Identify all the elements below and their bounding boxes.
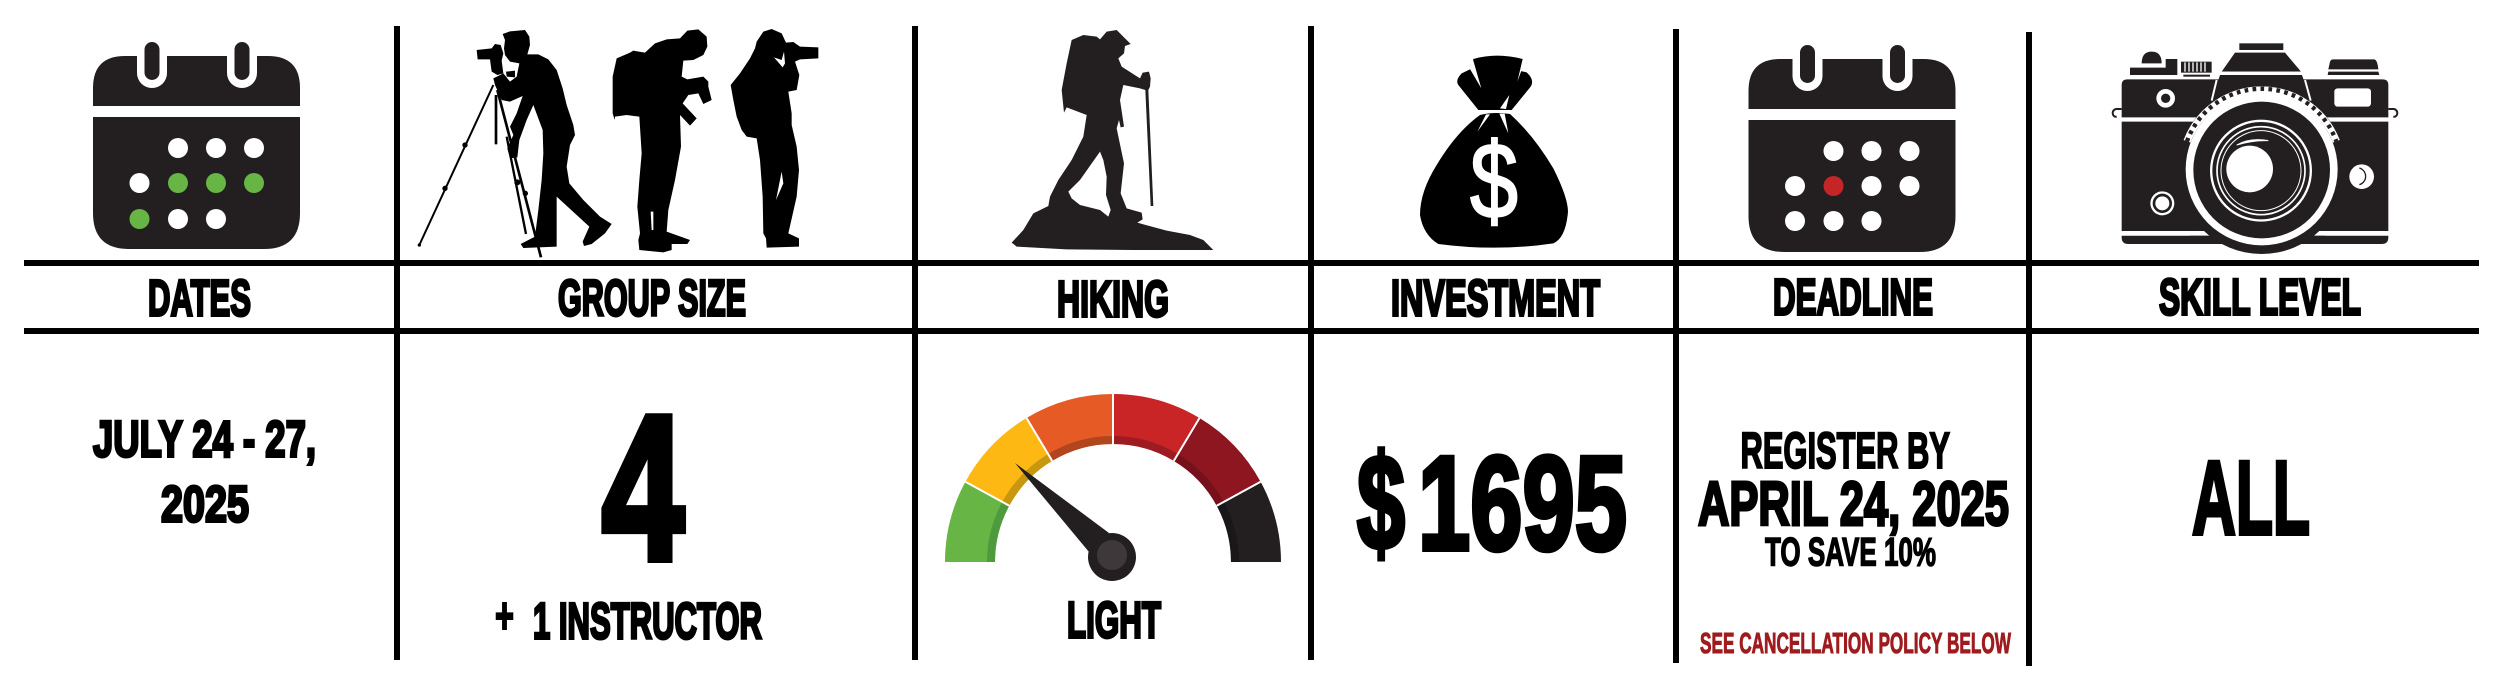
panel: skill level (2113, 43, 2397, 557)
heading: hiking: HIKING (1057, 270, 1169, 328)
text: group size number: 4 (602, 373, 684, 603)
icon: three photographers (418, 29, 818, 257)
text: plus one instructor: 1 INSTRUCTOR (533, 592, 762, 650)
panel: investment (1357, 56, 1627, 578)
text: price (1357, 427, 1627, 578)
panel: hiking (945, 30, 1281, 649)
panel: dates (93, 30, 316, 532)
panel: group size (418, 29, 818, 649)
camera lens (2186, 93, 2338, 245)
text: hiking level: LIGHT (1067, 592, 1161, 648)
icon: hiker on rock (1012, 30, 1213, 250)
text: discount: TO SAVE 10% (1765, 530, 1936, 574)
text: plus one instructor: + (495, 587, 514, 644)
text: date range (93, 410, 316, 532)
text: date range: 2025 (161, 476, 249, 532)
icon: camera (2113, 43, 2397, 254)
text: skill level value: ALL (2192, 440, 2310, 557)
icon: money bag: $ (1470, 120, 1518, 241)
gauge needle (1015, 463, 1136, 581)
camera knobs (2150, 164, 2374, 215)
text: deadline date: APRIL 24, 2025 (1698, 469, 2009, 539)
photographer looking at camera (613, 29, 712, 252)
text: date range: JULY 24 - 27, (93, 410, 316, 468)
icon: calendar with green dates (93, 30, 300, 249)
text: price: $ (1357, 427, 1405, 578)
text: register by: REGISTER BY (1740, 422, 1950, 479)
text: plus one instructor (495, 587, 762, 650)
photographer with telephoto lens (731, 29, 818, 248)
icon: money bag (1420, 56, 1568, 248)
heading: investment: INVESTMENT (1391, 270, 1600, 326)
heading: skill level: SKILL LEVEL (2159, 268, 2361, 326)
heading: dates: DATES (148, 270, 251, 326)
heading: group size: GROUP SIZE (558, 270, 746, 326)
panel: deadline (1698, 33, 2011, 660)
photographer with tripod (418, 30, 612, 257)
heading: deadline: DEADLINE (1773, 268, 1933, 326)
text: price: 1695 (1418, 430, 1627, 578)
text: cancellation note: SEE CANCELLATION POLICY BELOW (1700, 628, 2011, 660)
icon: calendar with red date (1748, 33, 1956, 252)
chart: difficulty gauge (945, 394, 1281, 581)
